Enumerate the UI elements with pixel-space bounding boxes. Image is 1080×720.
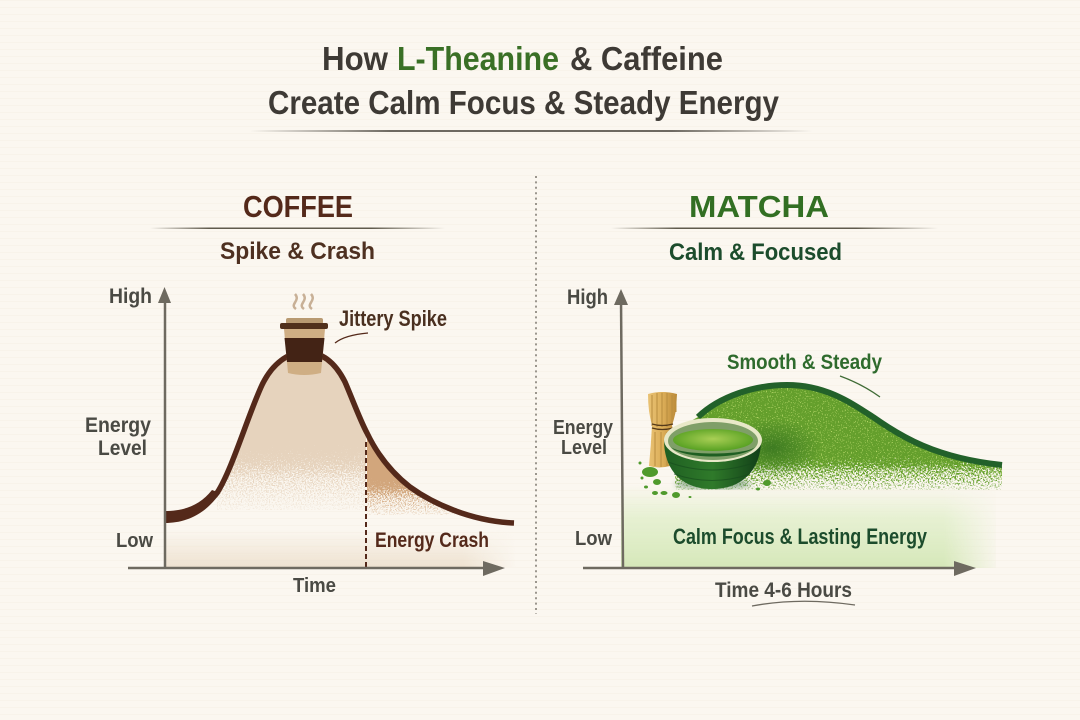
coffee subtitle: Spike & Crash [220, 238, 375, 265]
matcha axis labels: Energy [553, 417, 614, 439]
matcha axis labels: Low [575, 528, 612, 550]
matcha axis labels: Level [561, 437, 607, 459]
title underline [250, 130, 812, 132]
matcha subtitle: Calm & Focused [669, 239, 842, 266]
coffee axis labels: Energy [85, 414, 151, 437]
calm focus label: Calm Focus & Lasting Energy [673, 524, 928, 549]
coffee axes [128, 287, 505, 576]
panel: coffee [85, 189, 516, 597]
coffee area fill [166, 360, 503, 567]
coffee axis labels: Level [98, 437, 147, 460]
jittery spike label: Jittery Spike [339, 306, 447, 331]
smooth tick [840, 376, 880, 397]
coffee heading rule [150, 228, 445, 229]
coffee axis labels: High [109, 285, 152, 308]
matcha axis labels: High [567, 286, 608, 309]
crash marker line [365, 442, 367, 567]
matcha axis labels: Time 4-6 Hours [715, 579, 852, 602]
panel: matcha [553, 189, 1005, 606]
center divider [535, 176, 537, 614]
matcha area fill [675, 388, 1002, 490]
title [268, 40, 780, 121]
title: L-Theanine [397, 40, 559, 77]
title: & Caffeine [570, 40, 723, 77]
coffee heading: COFFEE [243, 189, 353, 224]
matcha base wash [621, 494, 992, 568]
curve start thickening [165, 490, 220, 523]
matcha axis labels [553, 286, 852, 602]
coffee energy curve [165, 352, 514, 523]
energy crash label: Energy Crash [375, 529, 489, 552]
icon: matcha powder splatter [638, 462, 771, 498]
coffee axis labels: Time [293, 575, 336, 597]
matcha heading rule [611, 228, 938, 229]
icon: bamboo whisk [648, 392, 677, 468]
jittery spike label [335, 306, 447, 343]
matcha heading: MATCHA [689, 189, 829, 224]
smooth and steady label: Smooth & Steady [727, 351, 882, 374]
icon: coffee cup [280, 294, 328, 375]
matcha axes [583, 289, 976, 576]
coffee axis labels [85, 285, 336, 597]
matcha energy curve [698, 385, 1002, 465]
coffee axis labels: Low [116, 530, 153, 552]
icon: matcha bowl [664, 418, 762, 489]
title: How [322, 40, 388, 77]
title: Create Calm Focus & Steady Energy [268, 84, 780, 121]
time underline [752, 601, 855, 606]
